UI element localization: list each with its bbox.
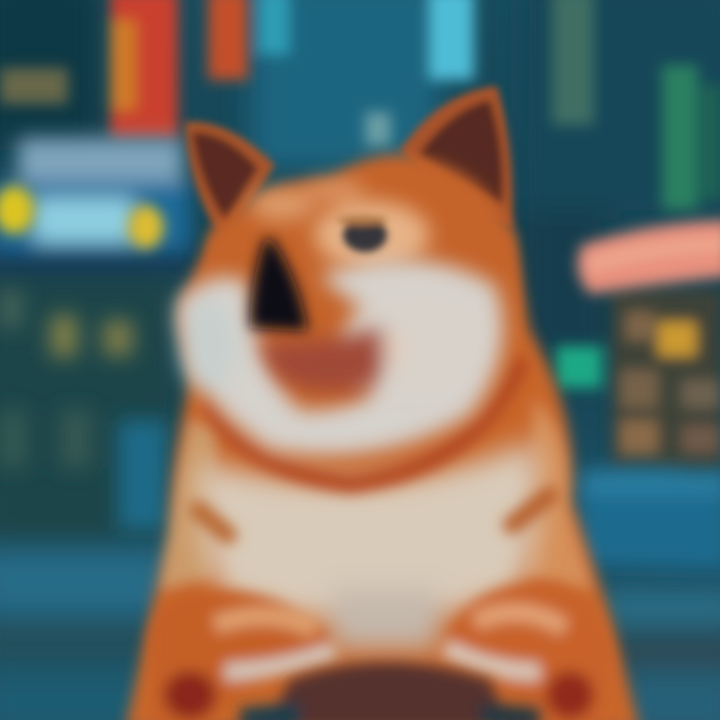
dog: face cream patches bbox=[250, 180, 430, 269]
dog: dark object under paws bbox=[240, 662, 540, 720]
dog: left ear bbox=[185, 122, 275, 245]
dog: body bbox=[125, 230, 640, 720]
dog: mouth bbox=[258, 328, 407, 391]
background: left building windows bbox=[0, 290, 168, 530]
background: right blue car bbox=[578, 467, 720, 570]
dog: eye bbox=[336, 215, 388, 252]
dog: left paw bbox=[150, 590, 335, 720]
dog: white muzzle and cheeks bbox=[176, 260, 503, 455]
dog: orange neck band bbox=[198, 365, 550, 535]
dog: right paw bbox=[445, 582, 612, 720]
background: right shop with pink awning bbox=[556, 220, 720, 470]
dog: white chest bbox=[198, 440, 540, 650]
dog: right ear bbox=[400, 86, 513, 230]
dog bbox=[125, 86, 640, 720]
background: left sign and towers bbox=[0, 0, 720, 210]
dog: head bbox=[179, 154, 518, 459]
dog: nose bbox=[250, 238, 308, 332]
background: left blue and yellow awning bbox=[0, 138, 190, 272]
